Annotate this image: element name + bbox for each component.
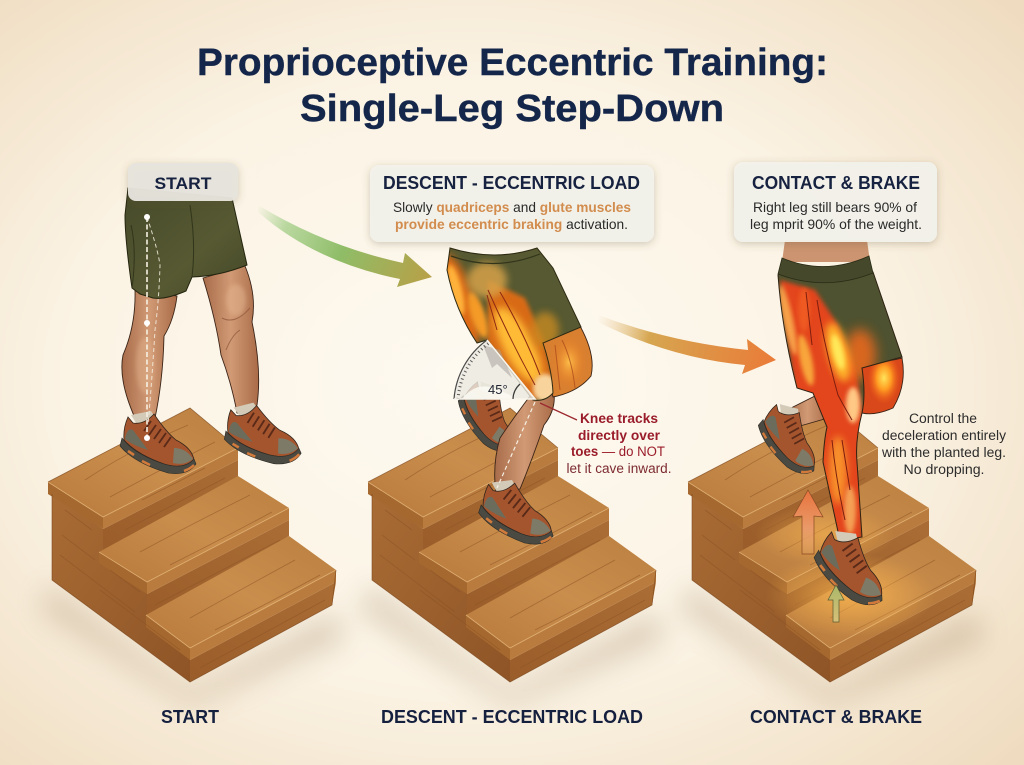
coaching note: deceleration entirely <box>882 428 1006 443</box>
arrow: start to descent <box>258 205 432 287</box>
coaching note <box>881 411 1006 477</box>
alignment line <box>144 214 160 441</box>
right leg raised <box>203 266 259 414</box>
shoe: right <box>222 400 302 467</box>
protractor 45 degrees: 45° <box>488 382 508 397</box>
card: descent <box>370 165 654 242</box>
wooden steps: descent <box>368 408 656 682</box>
card: descent: Slowly quadriceps and glute muscles <box>393 199 631 215</box>
shorts and loaded leg <box>776 272 902 545</box>
coaching note: No dropping. <box>904 462 984 477</box>
step glow <box>755 505 935 637</box>
card: start: START <box>154 174 212 193</box>
arrow: descent to contact <box>598 315 776 374</box>
shoe: left planted <box>120 411 196 474</box>
shoe: planted <box>805 523 900 610</box>
back thigh with glow <box>540 326 592 397</box>
wooden steps: start <box>48 408 336 682</box>
knee callout text: directly over <box>578 428 661 443</box>
panel: descent <box>368 165 672 682</box>
back thigh <box>860 352 903 414</box>
knee callout line <box>540 403 577 420</box>
card: contact <box>734 162 937 242</box>
coaching note: Control the <box>909 411 977 426</box>
left leg planted <box>122 290 177 418</box>
coaching note: with the planted leg. <box>881 445 1006 460</box>
floor shadows <box>40 585 985 705</box>
knee callout text: let it cave inward. <box>566 461 672 476</box>
up force arrow: green <box>828 585 844 622</box>
title <box>197 42 828 130</box>
bottom label: start: START <box>161 707 219 727</box>
alignment dashed line <box>497 402 535 488</box>
card: start <box>128 163 238 201</box>
shoe: trailing <box>446 374 533 457</box>
card: contact: leg mprit 90% of the weight. <box>750 216 922 232</box>
back lower leg <box>787 396 828 428</box>
card: contact: CONTACT & BRAKE <box>752 173 920 193</box>
bottom label: descent: DESCENT - ECCENTRIC LOAD <box>381 707 643 727</box>
panel: start <box>48 163 336 682</box>
shorts <box>125 188 247 298</box>
shoe: planted <box>477 478 557 546</box>
wooden steps: contact <box>688 408 976 682</box>
knee callout text <box>566 411 672 476</box>
title: Proprioceptive Eccentric Training: <box>197 42 828 84</box>
up force arrow: orange <box>793 490 823 554</box>
panel: contact and brake <box>688 162 1006 682</box>
title: Single-Leg Step-Down <box>300 88 724 130</box>
knee callout text: toes — do NOT <box>571 444 665 459</box>
bottom label: contact: CONTACT & BRAKE <box>750 707 922 727</box>
card: descent: DESCENT - ECCENTRIC LOAD <box>383 173 640 193</box>
shorts and loaded thigh <box>432 248 581 402</box>
protractor 45 degrees <box>454 340 535 399</box>
knee callout text: Knee tracks <box>580 411 658 426</box>
card: contact: Right leg still bears 90% of <box>753 199 917 215</box>
card: descent: provide eccentric braking activation. <box>395 216 628 232</box>
torso <box>782 240 870 262</box>
lower leg: planted <box>495 393 554 494</box>
shoe: back <box>747 396 835 479</box>
waistband <box>778 256 873 283</box>
